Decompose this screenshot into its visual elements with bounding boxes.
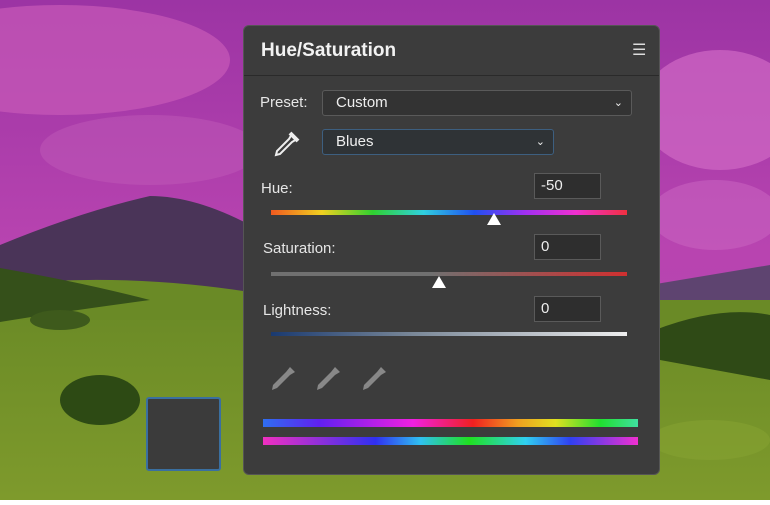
channel dropdown — [322, 129, 554, 155]
panel: Hue/Saturation: ⌄ — [614, 97, 623, 109]
panel: Hue/Saturation — [243, 25, 660, 475]
panel: Hue/Saturation: 0 — [541, 300, 549, 317]
hue slider: Hue: — [261, 180, 293, 197]
color bars — [263, 419, 638, 427]
panel: Hue/Saturation: Custom — [336, 94, 388, 111]
preset row: Preset: — [260, 94, 308, 111]
lightness slider: Lightness: — [263, 302, 331, 319]
channel dropdown: Blues — [336, 133, 374, 150]
channel dropdown: ⌄ — [536, 136, 545, 148]
icon: eyedropper — [274, 132, 300, 156]
panel: Hue/Saturation: 0 — [541, 238, 549, 255]
saturation slider: Saturation: — [263, 240, 336, 257]
icons: eyedroppers — [272, 367, 386, 390]
panel: Hue/Saturation: -50 — [541, 177, 563, 194]
heading: Hue/Saturation — [261, 40, 396, 61]
color swatch — [146, 397, 221, 471]
icon: menu: ☰ — [632, 42, 646, 59]
